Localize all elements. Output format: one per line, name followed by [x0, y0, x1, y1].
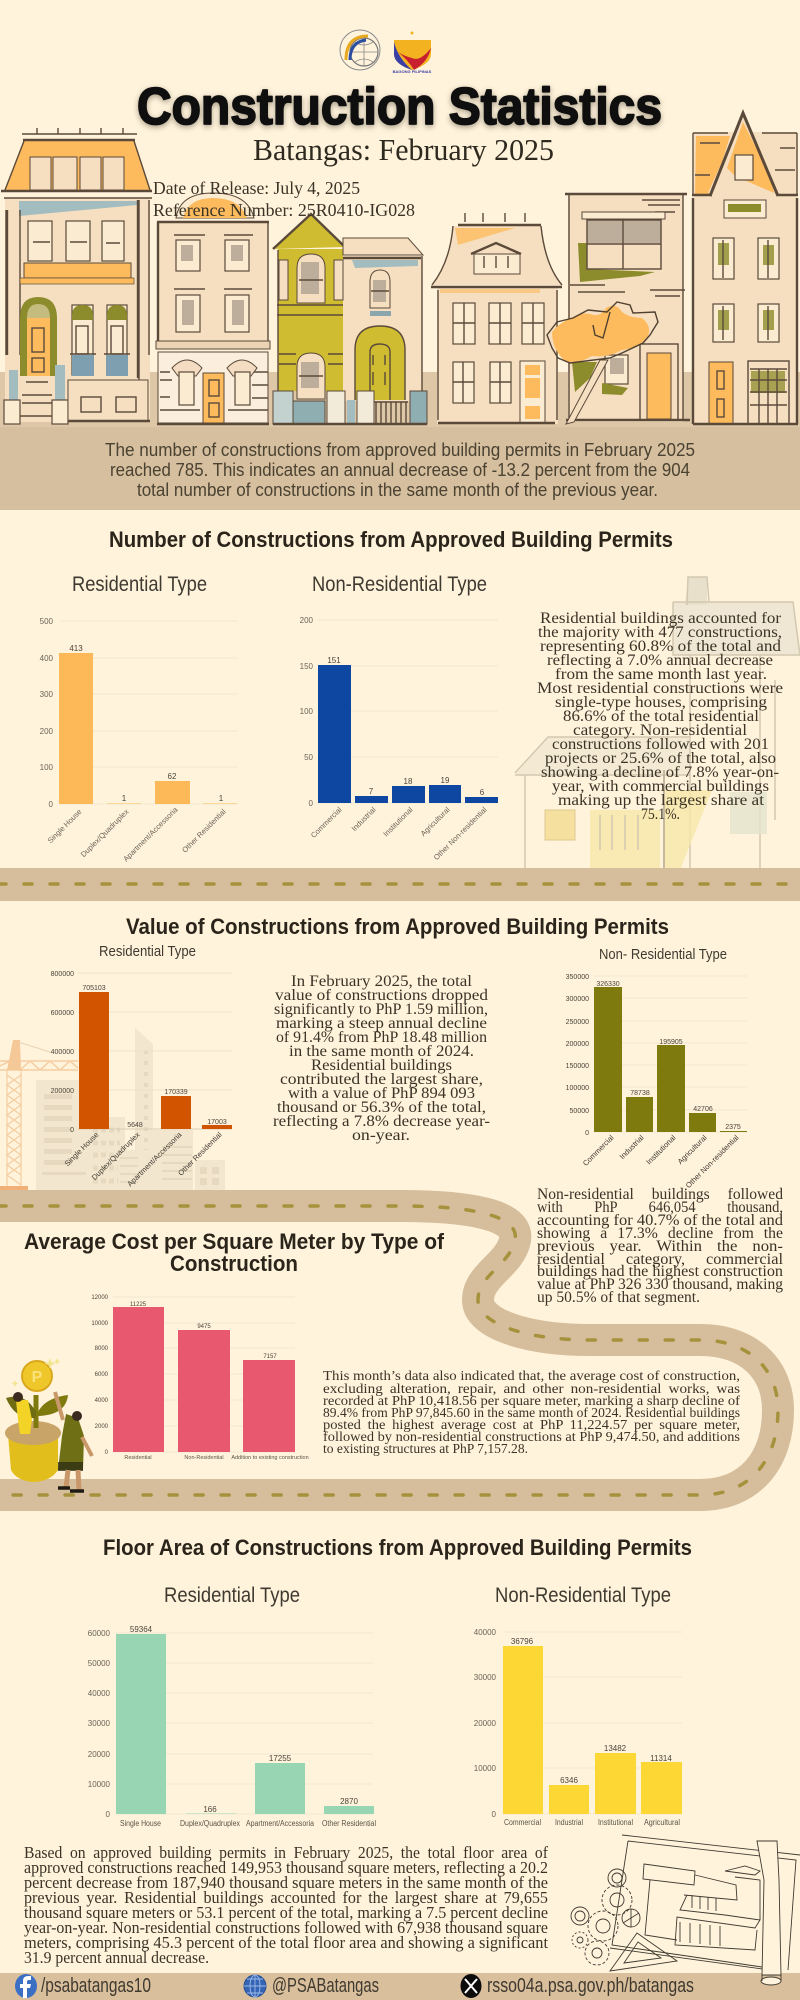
house 1: [1, 128, 152, 424]
set square: [610, 1933, 677, 1971]
intro summary: The number of constructions from approved building permits in February 2025: [105, 440, 695, 460]
heading: Floor Area of Constructions from Approved Building Permits: [103, 1535, 692, 1560]
bar chart: non-residential value: 300000: [566, 996, 589, 1003]
bar chart: residential count: 200: [40, 727, 54, 736]
intro summary: total number of constructions in the same month of the previous year.: [137, 480, 658, 500]
bar chart: non-residential value: 100000: [566, 1085, 589, 1092]
bar chart: average cost: Non-Residential: [184, 1455, 224, 1461]
paragraph: non-residential value: showing a 17.3% decline from the: [537, 1225, 783, 1242]
paragraph: value summary: In February 2025, the total: [291, 973, 472, 990]
paragraph: number summary: single-type houses, comprising: [555, 694, 767, 711]
release info: Date of Release: July 4, 2025: [153, 178, 360, 198]
paragraph: number summary: reflecting a 7.0% annual decrease: [547, 652, 773, 669]
paragraph: value summary: value of constructions dropped: [275, 987, 488, 1004]
bar chart: non-residential floor area: 13482: [604, 1744, 627, 1753]
bar chart: residential floor area: Other Residential: [322, 1819, 376, 1828]
bar chart: non-residential floor area: 36796: [511, 1637, 534, 1646]
bar chart: non-residential count: Commercial: [309, 805, 344, 840]
bar chart: residential floor area: 30000: [88, 1719, 111, 1728]
heading: [24, 1229, 445, 1276]
house 5: [565, 194, 690, 422]
bar chart: non-residential count: 18: [404, 777, 413, 786]
illustration: money plant and people: [5, 1358, 92, 1491]
bar chart: residential floor area: 10000: [88, 1780, 111, 1789]
paragraph: floor area: 31.9 percent annual decrease.: [24, 1948, 209, 1967]
bar chart: residential floor area: 20000: [88, 1750, 111, 1759]
bar chart: non-residential value: 326330: [596, 981, 620, 988]
paragraph: floor area: [24, 1843, 548, 1967]
bar chart: non-residential count: 50: [304, 753, 314, 762]
logo: Bagong Pilipinas: BAGONG PILIPINAS: [393, 69, 432, 74]
bar chart: non-residential count: Agricultural: [419, 805, 452, 838]
paragraph: average cost: posted the highest average cost at PhP 11,224.57 per square meter,: [323, 1418, 740, 1433]
icon: facebook: [15, 1974, 37, 1998]
bar chart: non-residential count: Industrial: [350, 805, 378, 833]
bar chart: average cost: Residential: [124, 1455, 152, 1461]
bar chart: average cost: 4000: [95, 1398, 109, 1404]
bar chart: non-residential count: 19: [441, 776, 450, 785]
bar chart: non-residential floor area: Industrial: [555, 1818, 583, 1827]
paragraph: floor area: approved constructions reached 149,953 thousand square meters, reflecting a 20.2: [24, 1858, 548, 1877]
bar chart: residential count: 100: [40, 763, 54, 772]
heading: Value of Constructions from Approved Building Permits: [126, 914, 669, 939]
city illustration background: [0, 1028, 225, 1192]
paragraph: floor area: year-on-year. Non-residential constructions followed with 67,938 thousand square: [24, 1918, 548, 1937]
bar chart: non-residential floor area: 0: [492, 1810, 497, 1819]
bar chart: non-residential floor area: 6346: [560, 1776, 578, 1785]
bar chart: non-residential value: 42706: [693, 1106, 713, 1113]
header ground band: [0, 372, 800, 510]
bar chart: non-residential value: 2375: [725, 1124, 741, 1131]
paragraph: value summary: thousand or 56.3% of the total,: [277, 1099, 486, 1116]
bar chart: average cost: 8000: [95, 1346, 109, 1352]
bar chart: average cost: 7157: [263, 1354, 277, 1360]
paragraph: non-residential value: accounting for 40.7% of the total and: [537, 1212, 783, 1229]
paragraph: value summary: contributed the largest share,: [280, 1071, 483, 1088]
bar chart: non-residential count: 7: [369, 787, 374, 796]
bar chart: residential floor area: 60000: [88, 1629, 111, 1638]
bar chart: average cost: 6000: [95, 1372, 109, 1378]
paragraph: average cost: to existing structures at PhP 7,157.28.: [323, 1442, 528, 1457]
bar chart: non-residential count: 150: [300, 662, 314, 671]
paragraph: non-residential value: previous year. Within the non-: [537, 1238, 783, 1255]
footer band: [0, 1973, 800, 2000]
bar chart: non-residential value: 150000: [566, 1063, 589, 1070]
paragraph: non-residential value: [537, 1186, 783, 1306]
paragraph: number summary: 86.6% of the total residential: [563, 708, 759, 725]
paragraph: number summary: showing a decline of 7.8% year-on-: [541, 764, 779, 781]
house 4: [431, 213, 562, 424]
text: title: Construction Statistics: [137, 78, 662, 136]
bar chart: residential floor area: 2870: [340, 1797, 358, 1806]
paragraph: number summary: projects or 25.6% of the total, also: [545, 750, 776, 767]
section: average cost: [5, 1229, 740, 1491]
section: value of constructions: [51, 914, 783, 1306]
paragraph: number summary: the majority with 477 constructions,: [538, 624, 782, 641]
bar chart: residential count: 300: [40, 690, 54, 699]
paragraph: floor area: previous year. Residential buildings accounted for the largest share at 79,655: [24, 1888, 548, 1907]
house 3: [273, 214, 427, 424]
bar chart: non-residential count: 6: [480, 788, 485, 797]
bar chart: non-residential floor area: 20000: [474, 1719, 497, 1728]
bar chart: residential value: Single House: [63, 1130, 101, 1168]
house 6: [692, 113, 798, 424]
gears: [571, 1869, 640, 1965]
bar chart: average cost: Addition to existing construction: [231, 1455, 309, 1461]
road: straight divider: [0, 868, 800, 901]
paragraph: number summary: representing 60.8% of the total and: [540, 638, 781, 655]
bar chart: non-residential value: Institutional: [644, 1133, 678, 1166]
heading: Number of Constructions from Approved Building Permits: [109, 527, 673, 552]
paragraph: value summary: on-year.: [352, 1127, 410, 1144]
bar chart: residential value: 705103: [82, 985, 106, 992]
bar chart: non-residential floor area: Institutional: [598, 1818, 633, 1827]
chart heading: residential: Residential Type: [72, 573, 207, 596]
bar chart: average cost: 11225: [130, 1302, 147, 1308]
paragraph: value summary: Residential buildings: [311, 1057, 452, 1074]
paragraph: floor area: Based on approved building permits in February 2025, the total floor area of: [24, 1843, 548, 1862]
bar chart: residential count: 1: [122, 794, 127, 803]
bar chart: residential floor area: Apartment/Accessoria: [246, 1819, 314, 1828]
chart heading: non-residential: Non-Residential Type: [312, 573, 487, 596]
bar chart: residential floor area: 50000: [88, 1659, 111, 1668]
crane: [0, 1040, 78, 1192]
paragraph: non-residential value: value at PhP 326 330 thousand, making: [537, 1276, 783, 1293]
intro summary: reached 785. This indicates an annual decrease of -13.2 percent from the 904: [110, 460, 690, 480]
paragraph: number summary: from the same month last year.: [555, 666, 767, 683]
tree: [547, 302, 658, 424]
bar chart: residential count: 62: [168, 772, 177, 781]
bar chart: non-residential floor area: 10000: [474, 1764, 497, 1773]
bar chart: residential count: Duplex/Quadruplex: [79, 807, 131, 859]
bar chart: residential value: 200000: [51, 1088, 74, 1095]
bar chart: residential count: 413: [69, 644, 83, 653]
handle: facebook: /psabatangas10: [41, 1975, 151, 1997]
intro summary: [105, 440, 695, 500]
paragraph: average cost: [323, 1369, 740, 1457]
bar chart: residential count: 500: [40, 617, 54, 626]
bar chart: non-residential value: 200000: [566, 1041, 589, 1048]
chart heading: non-residential: Non- Residential Type: [599, 946, 727, 963]
bar chart: residential floor area: 17255: [269, 1754, 292, 1763]
bar chart: non-residential value: Other Non-residential: [684, 1133, 741, 1190]
bar chart: non-residential value: 350000: [566, 974, 589, 981]
paragraph: number summary: year, with commercial buildings: [552, 778, 769, 795]
paragraph: number summary: making up the largest share at: [558, 792, 765, 809]
chart heading: non-residential: Non-Residential Type: [495, 1584, 671, 1607]
paragraph: number summary: Most residential constructions were: [537, 680, 783, 697]
bar chart: non-residential value: Industrial: [618, 1133, 646, 1161]
bar chart: non-residential floor area: 11314: [650, 1754, 672, 1763]
icon: X: [460, 1974, 482, 1998]
bar chart: non-residential floor area: Commercial: [504, 1818, 541, 1827]
bar chart: residential count: 400: [40, 654, 54, 663]
house 2: [156, 193, 270, 424]
logos: [340, 30, 432, 74]
bar chart: residential floor area: [88, 1625, 376, 1828]
bar chart: non-residential value: 195905: [659, 1039, 683, 1046]
bar chart: residential floor area: 166: [203, 1805, 217, 1814]
release info: Reference Number: 25R0410-IG028: [153, 200, 415, 220]
handle: social: @PSABatangas: [272, 1975, 379, 1997]
bar chart: residential count: [40, 617, 238, 863]
paragraph: value summary: [273, 973, 490, 1144]
bar chart: non-residential value: [566, 974, 747, 1190]
chart heading: residential: Residential Type: [99, 943, 196, 960]
logo: PSA: [340, 30, 380, 70]
paragraph: value summary: significantly to PhP 1.59 million,: [274, 1001, 488, 1018]
paragraph: average cost: followed by non-residential constructions at PhP 9,474.50, and additions: [323, 1430, 740, 1445]
heading: Average Cost per Square Meter by Type of: [24, 1229, 445, 1254]
bar chart: residential floor area: 40000: [88, 1689, 111, 1698]
paragraph: value summary: in the same month of 2024.: [289, 1043, 474, 1060]
paragraph: value summary: reflecting a 7.8% decrease year-: [273, 1113, 490, 1130]
paragraph: value summary: of 91.4% from PhP 18.48 million: [276, 1029, 487, 1046]
house sketch: [643, 1864, 760, 1950]
paragraph: average cost: 89.4% from PhP 97,845.60 in the same month of 2024. Residential buildings: [323, 1406, 740, 1421]
bar chart: non-residential count: 200: [300, 616, 314, 625]
bar chart: residential count: Single House: [46, 807, 84, 845]
paragraph: number summary: constructions followed with 201: [552, 736, 769, 753]
bar chart: non-residential value: Commercial: [581, 1133, 616, 1168]
bar chart: non-residential floor area: Agricultural: [644, 1818, 680, 1827]
subtitle: Batangas: February 2025: [253, 132, 554, 167]
bar chart: residential value: Duplex/Quadruplex: [90, 1130, 142, 1182]
paragraph: non-residential value: up 50.5% of that segment.: [537, 1289, 700, 1306]
bar chart: average cost: 9475: [197, 1324, 211, 1330]
bar chart: non-residential count: [300, 616, 498, 862]
paragraph: number summary: Residential buildings accounted for: [540, 610, 782, 627]
paragraph: number summary: [537, 610, 783, 823]
faded house background: [515, 577, 800, 870]
website: rsso04a.psa.gov.ph/batangas: [487, 1975, 694, 1997]
bar chart: residential floor area: 0: [106, 1810, 111, 1819]
bar chart: average cost: 12000: [91, 1295, 109, 1301]
bar chart: residential value: Other Residential: [176, 1130, 224, 1178]
paragraph: floor area: percent decrease from 187,940 thousand square meters in the same month of the: [24, 1873, 548, 1892]
houses illustration: [1, 113, 798, 424]
release info: [153, 178, 415, 220]
bar chart: non-residential value: 78738: [630, 1090, 650, 1097]
bar chart: non-residential floor area: 40000: [474, 1628, 497, 1637]
bar chart: non-residential count: 100: [300, 707, 314, 716]
bar chart: non-residential count: Institutional: [381, 805, 415, 838]
bar chart: average cost: 2000: [95, 1424, 109, 1430]
bar chart: non-residential count: 151: [327, 656, 341, 665]
bar chart: non-residential value: 50000: [570, 1108, 589, 1115]
road: winding: [0, 1206, 778, 1495]
bar chart: residential count: 1: [219, 794, 224, 803]
paragraph: non-residential value: buildings had the highest construction: [537, 1263, 783, 1280]
bar chart: residential value: 0: [70, 1127, 74, 1134]
heading: Construction: [170, 1251, 298, 1276]
paragraph: average cost: recorded at PhP 10,418.56 per square meter, marking a sharp decline of: [323, 1394, 740, 1409]
bar chart: residential value: 5648: [127, 1122, 143, 1129]
bar chart: non-residential floor area: [474, 1628, 682, 1827]
paragraph: non-residential value: residential category, commercial: [537, 1251, 783, 1268]
paragraph: average cost: This month’s data also indicated that, the average cost of construction,: [323, 1369, 740, 1384]
bar chart: non-residential value: Agricultural: [676, 1133, 709, 1166]
bar chart: residential count: Apartment/Accessoria: [121, 805, 180, 863]
bar chart: residential value: 170339: [164, 1089, 188, 1096]
bar chart: average cost: 10000: [91, 1321, 109, 1327]
bar chart: non-residential count: Other Non-residential: [432, 805, 489, 862]
bar chart: residential value: [51, 971, 232, 1188]
bar chart: residential value: 17003: [207, 1119, 227, 1126]
section: number of constructions: [40, 527, 783, 863]
paragraph: value summary: marking a steep annual decline: [276, 1015, 487, 1032]
bar chart: residential floor area: Single House: [120, 1819, 161, 1828]
rolled plan: [757, 1841, 781, 1985]
chart heading: residential: Residential Type: [164, 1584, 300, 1607]
bar chart: non-residential floor area: 30000: [474, 1673, 497, 1682]
bar chart: non-residential value: 250000: [566, 1019, 589, 1026]
bar chart: residential count: Other Residential: [180, 807, 228, 855]
paragraph: number summary: category. Non-residential: [573, 722, 747, 739]
bar chart: residential value: 600000: [51, 1010, 74, 1017]
bar chart: average cost: [91, 1295, 309, 1461]
bar chart: non-residential value: 0: [585, 1130, 589, 1137]
paragraph: non-residential value: Non-residential buildings followed: [537, 1186, 783, 1203]
paragraph: value summary: with a value of PhP 894 093: [288, 1085, 475, 1102]
bar chart: residential value: Apartment/Accessoria: [125, 1130, 184, 1188]
bar chart: average cost: 0: [105, 1450, 109, 1456]
bar chart: residential floor area: Duplex/Quadruplex: [180, 1819, 240, 1828]
paragraph: average cost: excluding alteration, repair, and other non-residential works, was: [323, 1382, 740, 1397]
bar chart: residential value: 400000: [51, 1049, 74, 1056]
illustration: money plant and people: P: [32, 1369, 43, 1386]
paragraph: floor area: thousand square meters or 53.1 percent of the total, marking a 7.5 percent decline: [24, 1903, 548, 1922]
paragraph: number summary: 75.1%.: [641, 806, 680, 823]
bar chart: non-residential count: 0: [309, 799, 314, 808]
icon: globe: [244, 1975, 266, 1997]
bar chart: residential value: 800000: [51, 971, 74, 978]
paragraph: non-residential value: with PhP 646,054 thousand,: [537, 1199, 783, 1216]
section: floor area: [24, 1535, 692, 1967]
bar chart: residential count: 0: [49, 800, 54, 809]
paragraph: floor area: meters, comprising 45.3 percent of the total floor area and showing a significant: [24, 1933, 548, 1952]
illustration: blueprint and gears: [571, 1835, 800, 1985]
bar chart: residential floor area: 59364: [130, 1625, 153, 1634]
